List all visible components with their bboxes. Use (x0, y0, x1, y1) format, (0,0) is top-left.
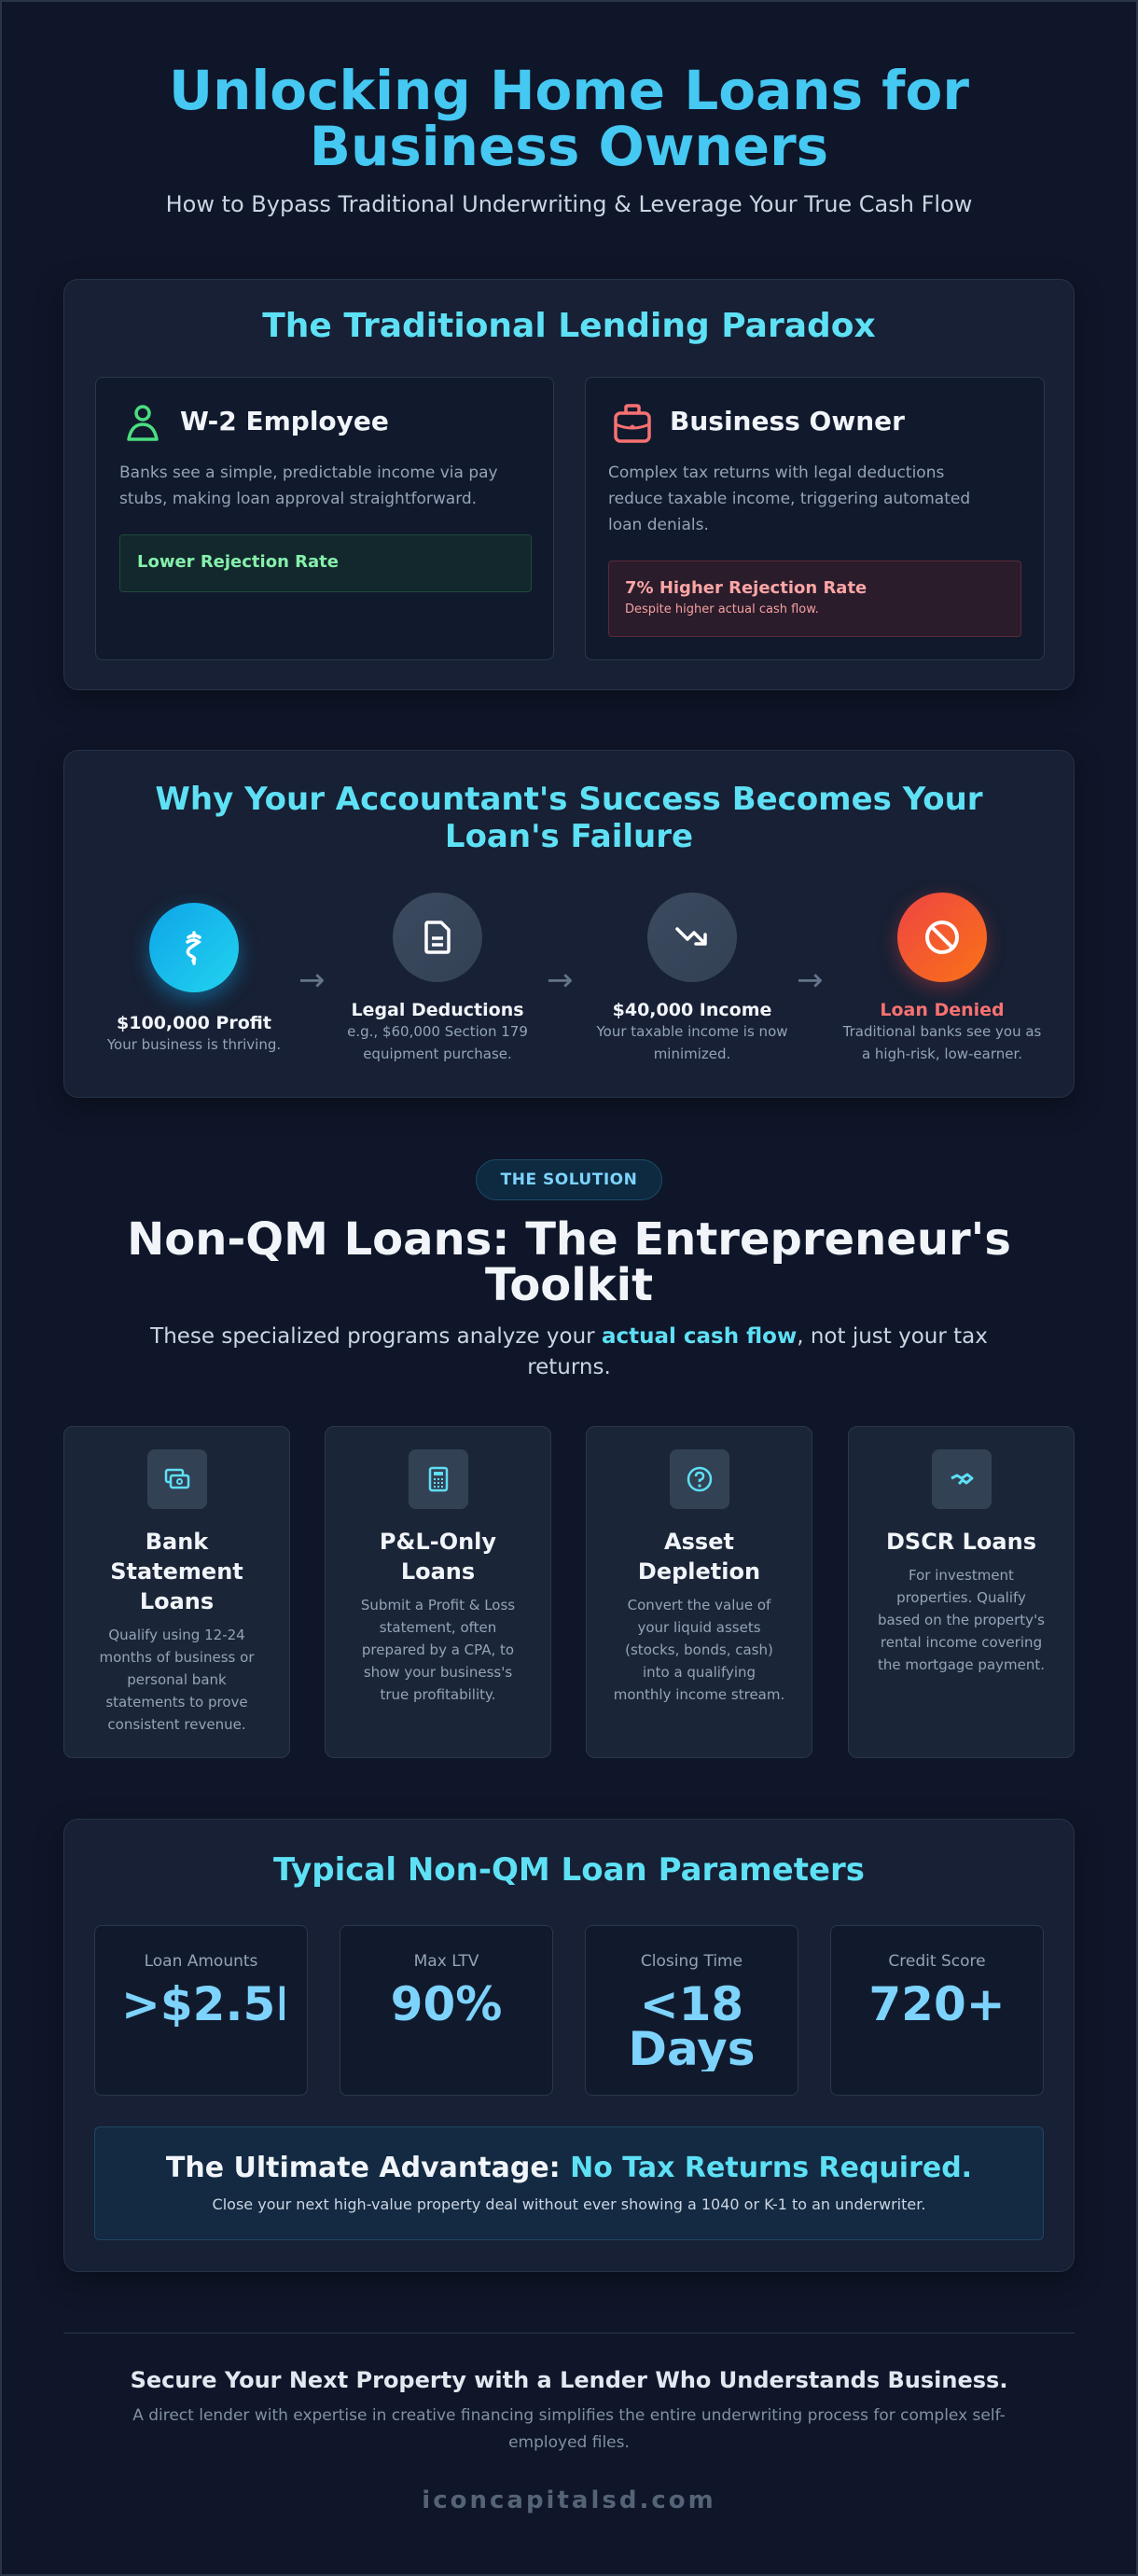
callout: ultimate advantage (94, 2126, 1044, 2240)
heading: non-QM toolkit (127, 1213, 1011, 1311)
callout: lower rejection: Lower Rejection Rate (137, 552, 339, 572)
icon: person (127, 405, 159, 441)
icon: briefcase (614, 404, 651, 443)
card: business owner (585, 377, 1045, 660)
card: bank statement: Bank Statement Loans (110, 1529, 243, 1614)
stat: loan amounts (94, 1925, 308, 2096)
footer url: iconcapitalsd.com (422, 2486, 716, 2514)
card: bank statement (63, 1426, 290, 1758)
heading: parameters: Typical Non-QM Loan Parameters (273, 1851, 865, 1889)
card: DSCR: DSCR Loans (886, 1529, 1036, 1555)
text: business owner: Complex tax returns with legal deductions reduce taxable income, triggering automated loan denials. (608, 464, 970, 534)
stat: LTV (340, 1925, 553, 2096)
title: Business Owners (310, 115, 828, 178)
heading: business owner: Business Owner (670, 406, 905, 436)
stat: credit score (830, 1925, 1044, 2096)
footer heading: Secure Your Next Property with a Lender Who Understands Business. (131, 2367, 1007, 2393)
step: income: $40,000 Income (613, 1000, 771, 1020)
icon: cash (147, 1449, 207, 1509)
heading: accountant: Why Your Accountant's Success Becomes Your (155, 781, 983, 818)
heading: accountant (155, 781, 983, 855)
card: P&L (325, 1426, 551, 1758)
badge: the solution: THE SOLUTION (501, 1170, 637, 1189)
heading: paradox: The Traditional Lending Paradox (262, 307, 876, 345)
callout: lower rejection (119, 534, 532, 592)
callout: ultimate advantage: Close your next high-value property deal without ever showing a 1040 or K-1 to an underwriter. (213, 2195, 925, 2213)
card: W-2 employee (95, 377, 554, 660)
step: denied: Traditional banks see you as a high-risk, low-earner. (843, 1023, 1041, 1062)
panel: loan parameters (63, 1819, 1075, 2272)
stat: credit score: Credit Score (888, 1952, 986, 1971)
card: P&L: Submit a Profit & Loss statement, often prepared by a CPA, to show your business's true profitability. (361, 1597, 515, 1703)
badge: the solution (476, 1159, 662, 1200)
text: solution intro: These specialized programs analyze your actual cash flow, not just your tax returns. (150, 1324, 988, 1379)
step: deductions: Legal Deductions (351, 1000, 524, 1020)
callout: ultimate advantage: The Ultimate Advantage: No Tax Returns Required. (166, 2152, 972, 2184)
step: deductions (347, 893, 528, 1062)
arrow 1: → (298, 962, 325, 999)
footer text: A direct lender with expertise in creative financing simplifies the entire underwriting process for complex self-employed files. (132, 2406, 1006, 2452)
stat: closing (585, 1925, 798, 2096)
card: asset depletion: Asset Depletion (638, 1529, 760, 1585)
card: asset depletion: Convert the value of your liquid assets (stocks, bonds, cash) into a qualifying monthly income stream. (614, 1597, 784, 1703)
card: asset depletion (586, 1426, 812, 1758)
title (169, 59, 969, 178)
card: P&L: P&L-Only Loans (380, 1529, 496, 1585)
heading: W-2 employee: W-2 Employee (180, 406, 389, 436)
callout: higher rejection (608, 561, 1021, 637)
step: deductions: e.g., $60,000 Section 179 equipment purchase. (347, 1023, 528, 1062)
step: denied: Loan Denied (880, 1000, 1005, 1020)
step: profit: $100,000 Profit (117, 1013, 271, 1033)
title: Unlocking Home Loans for (169, 59, 969, 122)
step: income (596, 893, 788, 1062)
text: W-2: Banks see a simple, predictable income via pay stubs, making loan approval straightforward. (119, 464, 498, 508)
card: bank statement: Qualify using 12-24 months of business or personal bank statements to prove consistent revenue. (99, 1627, 254, 1733)
step: income: Your taxable income is now minimized. (596, 1023, 788, 1062)
icon: handshake (931, 1449, 991, 1509)
callout: higher rejection: Despite higher actual cash flow. (625, 602, 819, 616)
stat: closing: Closing Time (641, 1952, 742, 1971)
icon: calculator (409, 1449, 468, 1509)
step: profit: Your business is thriving. (107, 1036, 281, 1053)
panel: accountant success (63, 750, 1075, 1098)
arrow 2: → (547, 962, 573, 999)
callout: higher rejection: 7% Higher Rejection Rate (625, 578, 867, 598)
step: profit (106, 899, 281, 1053)
heading: non-QM toolkit: Toolkit (485, 1259, 653, 1311)
stat: loan amounts: Loan Amounts (145, 1952, 257, 1971)
step: denied (843, 888, 1041, 1062)
card: DSCR: For investment properties. Qualify based on the property's rental income covering the mortgage payment. (878, 1567, 1045, 1673)
icon: question (670, 1449, 729, 1509)
card: DSCR (848, 1426, 1075, 1758)
subtitle: How to Bypass Traditional Underwriting & Leverage Your True Cash Flow (166, 191, 972, 217)
arrow 3: → (797, 962, 823, 999)
stat: LTV: Max LTV (414, 1952, 479, 1971)
heading: accountant: Loan's Failure (445, 818, 693, 855)
heading: non-QM toolkit: Non-QM Loans: The Entrepreneur's (127, 1213, 1011, 1266)
panel: traditional lending paradox (63, 279, 1075, 690)
